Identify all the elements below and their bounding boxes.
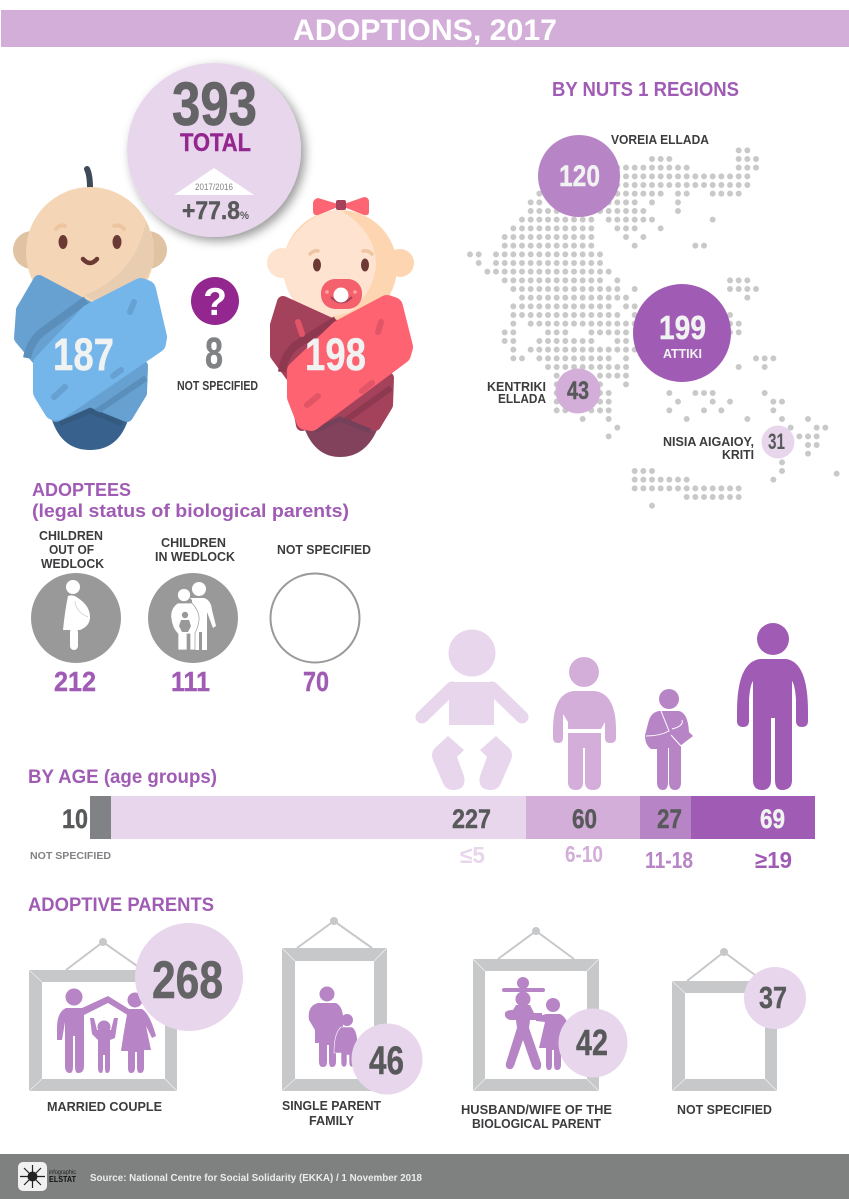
footer: ELSTAT: [49, 1174, 77, 1184]
panel: single parent family: [282, 917, 422, 1128]
age group labels: NOT SPECIFIED: [30, 850, 111, 862]
region: Kentriki Ellada: 43: [567, 377, 589, 405]
heading: adoptive parents: ADOPTIVE PARENTS: [28, 895, 214, 916]
panel: married couple: MARRIED COUPLE: [47, 1099, 162, 1114]
adoptees: out of wedlock: 212: [54, 666, 96, 697]
panel: married couple: 268: [152, 951, 223, 1010]
stacked age bar: 10: [62, 804, 88, 834]
adoptees: not specified: NOT SPECIFIED: [277, 543, 371, 557]
panel: husband or wife of the biological parent: HUSBAND/WIFE OF THE: [461, 1102, 612, 1117]
total circle: %: [240, 210, 249, 222]
adoptees: in wedlock: IN WEDLOCK: [155, 550, 235, 564]
icon: baby boy with count: 187: [53, 329, 114, 380]
adoptees: out of wedlock: [31, 529, 121, 697]
adoptees: not specified: 70: [303, 666, 329, 697]
region: Nisia Aigaioy, Kriti: 31: [768, 429, 785, 454]
region: Nisia Aigaioy, Kriti: NISIA AIGAIOY,: [663, 435, 754, 449]
adoptees: out of wedlock: WEDLOCK: [41, 557, 104, 571]
adoptees: in wedlock: 111: [171, 666, 210, 697]
panel: husband or wife of the biological parent: BIOLOGICAL PARENT: [472, 1116, 601, 1131]
region: Nisia Aigaioy, Kriti: [663, 426, 794, 462]
adoptees: out of wedlock: OUT OF: [49, 543, 94, 557]
age group labels: [30, 841, 792, 873]
panel: single parent family: SINGLE PARENT: [282, 1098, 381, 1113]
heading: adoptees: (legal status of biological parents): [32, 500, 349, 521]
panel: not specified parents: NOT SPECIFIED: [677, 1102, 772, 1117]
region: Attiki: 199: [659, 309, 706, 346]
title bar: ADOPTIONS, 2017: [293, 14, 557, 47]
not specified gender: 8: [205, 329, 223, 378]
icon: child age figure: [553, 657, 616, 790]
heading: by age: BY AGE (age groups): [28, 767, 217, 788]
age group labels: ≥19: [755, 847, 792, 873]
panel: not specified parents: [672, 948, 806, 1117]
age group labels: ≤5: [460, 842, 485, 868]
total circle: [127, 63, 301, 237]
total circle: 393: [172, 70, 257, 138]
region: Nisia Aigaioy, Kriti: KRITI: [722, 448, 754, 462]
icon: baby boy with count: [13, 169, 167, 450]
not specified gender: [177, 277, 258, 393]
region: Voreia Ellada: VOREIA ELLADA: [611, 132, 710, 147]
panel: husband or wife of the biological parent: 42: [576, 1022, 608, 1063]
adoptees: not specified: [270, 543, 371, 697]
heading: adoptees: ADOPTEES: [32, 479, 131, 500]
region: Kentriki Ellada: ELLADA: [498, 392, 546, 406]
stacked age bar: 60: [572, 804, 597, 834]
icon: baby girl with count: 198: [305, 329, 366, 380]
stacked age bar: 69: [760, 804, 785, 834]
dot map of Greece: [470, 150, 837, 506]
icon: adult age figure: [737, 623, 808, 790]
region: Kentriki Ellada: KENTRIKI: [487, 380, 546, 394]
panel: not specified parents: 37: [759, 980, 787, 1015]
footer: Source: National Centre for Social Solidarity (EKKA) / 1 November 2018: [90, 1172, 422, 1184]
heading: regions: BY NUTS 1 REGIONS: [552, 78, 739, 101]
footer: infographic: [49, 1169, 77, 1176]
panel: single parent family: FAMILY: [309, 1113, 354, 1128]
adoptees: out of wedlock: CHILDREN: [39, 529, 103, 543]
title bar: [1, 10, 849, 47]
icon: teen age figure: [645, 689, 693, 790]
total circle: TOTAL: [180, 129, 251, 157]
panel: husband or wife of the biological parent: [461, 927, 628, 1131]
region: Attiki: ATTIKI: [663, 346, 702, 361]
icon: baby age figure: [422, 630, 522, 790]
not specified gender: ?: [203, 281, 227, 324]
region: Voreia Ellada: 120: [559, 160, 600, 193]
total circle: 2017/2016: [195, 182, 233, 193]
not specified gender: NOT SPECIFIED: [177, 379, 258, 393]
total circle: +77.8: [182, 197, 240, 225]
adoptees: in wedlock: [148, 536, 238, 697]
heading: adoptees: [32, 479, 349, 521]
age group labels: 6-10: [565, 841, 603, 867]
panel: single parent family: 46: [369, 1039, 404, 1083]
region: Attiki: [633, 284, 731, 382]
panel: married couple: [29, 923, 243, 1114]
adoptees: in wedlock: CHILDREN: [161, 536, 226, 550]
region: Kentriki Ellada: [487, 368, 600, 414]
region: Voreia Ellada: [538, 132, 710, 217]
stacked age bar: 227: [452, 804, 491, 834]
age group labels: 11-18: [645, 847, 693, 873]
icon: baby girl with count: [267, 197, 414, 457]
footer: [0, 1154, 849, 1199]
stacked age bar: [62, 796, 815, 839]
stacked age bar: 27: [657, 804, 682, 834]
